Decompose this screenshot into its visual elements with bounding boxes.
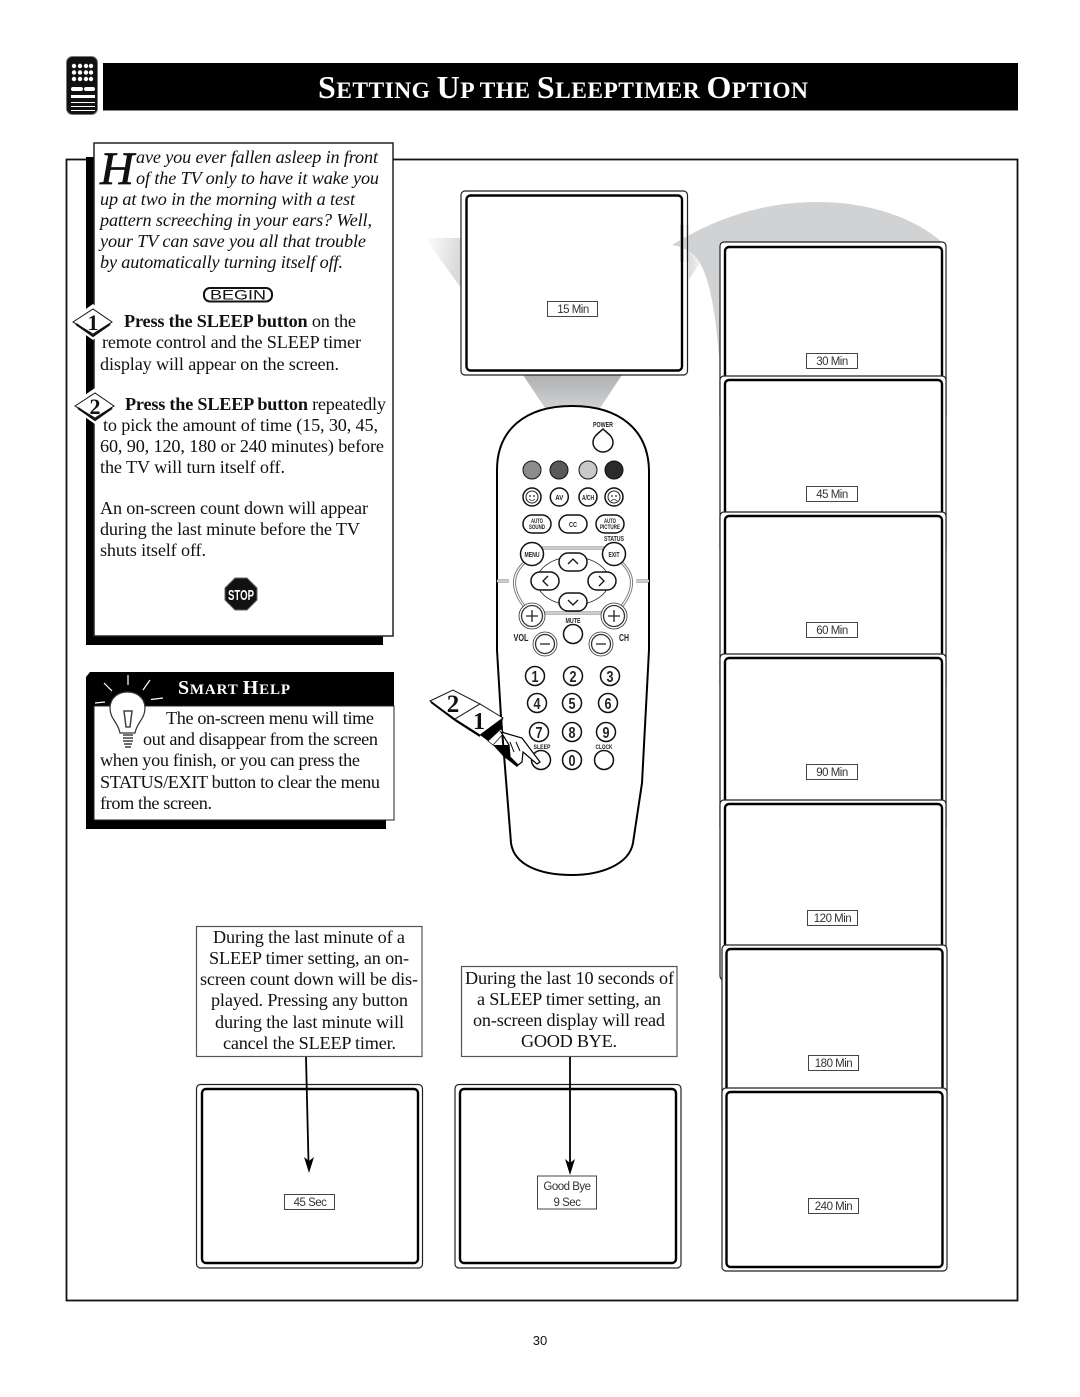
smart help text: when you finish, or you can press the	[100, 750, 360, 770]
smart help text: from the screen.	[100, 793, 212, 813]
countdown note: An on-screen count down will appear	[100, 498, 368, 518]
number buttons: CLOCK	[596, 744, 613, 751]
arrow: last minute to screen	[304, 1057, 314, 1173]
marker 1: 1	[473, 709, 485, 735]
callout: last ten seconds: GOOD BYE.	[521, 1031, 617, 1051]
beam: sweep to TV stack	[672, 202, 943, 375]
smart help text: The on-screen menu will time	[166, 708, 374, 728]
number buttons: SLEEP	[534, 744, 551, 751]
intro text: by automatically turning itself off.	[100, 252, 343, 272]
panel: stack of timer screens	[720, 242, 947, 1271]
step 2: the TV will turn itself off.	[100, 457, 285, 477]
callout: last ten seconds: a SLEEP timer setting, an	[477, 989, 661, 1009]
panel: smart help	[86, 672, 394, 829]
intro text: of the TV only to have it wake you	[136, 168, 379, 188]
function buttons: STATUS	[604, 536, 624, 543]
menu and exit buttons: MENU	[524, 552, 540, 559]
number buttons: 2	[570, 669, 577, 686]
countdown note: shuts itself off.	[100, 540, 206, 560]
step 2: Press the SLEEP button repeatedly	[125, 394, 387, 414]
callout: last minute: cancel the SLEEP timer.	[223, 1033, 396, 1053]
screen: 240 min	[722, 1088, 947, 1271]
step 1: 1	[88, 310, 98, 335]
smart help heading: SMART HELP	[178, 677, 290, 699]
function buttons: AUTO	[604, 519, 616, 525]
screen: good bye: 9 Sec	[554, 1197, 581, 1209]
volume, channel and mute buttons: CH	[619, 633, 629, 644]
power button	[593, 422, 613, 452]
marker 2: 2	[447, 691, 459, 718]
intro text	[98, 143, 379, 272]
arrow: last ten seconds to screen	[565, 1057, 575, 1175]
function buttons: AV	[555, 495, 564, 502]
screen: 45 min	[720, 376, 946, 554]
screen: 120 min: 120 Min	[814, 913, 851, 925]
label	[548, 302, 598, 316]
intro text: H	[99, 143, 137, 195]
screen: good bye	[455, 1084, 681, 1268]
smart help text: out and disappear from the screen	[143, 729, 378, 749]
main frame	[66, 160, 1018, 1300]
page number: 30	[533, 1333, 547, 1348]
beam: remote to TV	[523, 375, 622, 408]
step 2: to pick the amount of time (15, 30, 45,	[103, 415, 378, 436]
screen: 15 min	[461, 191, 688, 375]
screen: 30 min: 30 Min	[816, 356, 848, 368]
beam: pale left fan	[425, 238, 461, 288]
callout: last minute	[196, 926, 422, 1056]
callout: last minute: played. Pressing any button	[211, 990, 408, 1010]
title bar: SETTING UP THE SLEEPTIMER OPTION	[318, 69, 808, 105]
screen: 30 min	[720, 242, 946, 420]
number buttons: 8	[568, 725, 576, 742]
screen: 120 min	[720, 800, 946, 980]
intro text: pattern screeching in your ears? Well,	[98, 210, 372, 230]
number buttons: 9	[602, 725, 610, 742]
number buttons: 4	[534, 696, 541, 713]
number buttons: 0	[568, 753, 576, 770]
callout: last ten seconds: on-screen display will read	[473, 1010, 665, 1030]
callout: last minute: during the last minute will	[215, 1012, 404, 1032]
icon: remote control	[66, 56, 98, 114]
number buttons: 7	[536, 725, 543, 742]
number buttons: 6	[604, 696, 612, 713]
number buttons	[526, 666, 620, 770]
callout: last minute: During the last minute of a	[213, 927, 405, 947]
intro text: ave you ever fallen asleep in front	[136, 147, 379, 167]
step 2	[69, 388, 387, 477]
menu and exit buttons	[520, 542, 626, 566]
begin label	[204, 286, 272, 302]
screen: 90 min	[720, 654, 946, 832]
panel: introduction and steps	[67, 143, 393, 645]
function buttons: A/CH	[582, 495, 594, 502]
icon: pointing hand	[480, 718, 540, 767]
remote control	[497, 406, 649, 875]
function buttons	[523, 488, 624, 543]
begin label: BEGIN	[210, 286, 266, 302]
function buttons: CC	[569, 522, 577, 529]
intro text: your TV can save you all that trouble	[98, 231, 366, 251]
smart help text: STATUS/EXIT button to clear the menu	[100, 772, 380, 792]
step 1: display will appear on the screen.	[100, 354, 339, 374]
colour buttons	[523, 461, 623, 479]
navigation ring	[497, 548, 649, 613]
screen: 180 min	[722, 945, 947, 1125]
icon: light bulb	[95, 675, 163, 747]
label: 15 Min	[557, 304, 589, 316]
step 2: 60, 90, 120, 180 or 240 minutes) before	[100, 436, 384, 457]
screen: 60 min	[720, 512, 946, 690]
smart help text	[100, 708, 380, 813]
volume, channel and mute buttons: VOL	[514, 633, 528, 644]
intro text: up at two in the morning with a test	[100, 189, 356, 209]
number buttons: 3	[606, 669, 614, 686]
direction buttons	[531, 553, 616, 611]
step markers with pointing hand	[430, 690, 540, 767]
title bar	[103, 63, 1018, 110]
function buttons: PICTURE	[600, 525, 620, 531]
step 1: remote control and the SLEEP timer	[102, 332, 361, 352]
screen: 180 min: 180 Min	[815, 1058, 852, 1070]
countdown note	[100, 498, 368, 560]
function buttons: AUTO	[531, 519, 543, 525]
screen: 45 sec	[196, 1084, 422, 1268]
callout: last minute: screen count down will be dis-	[200, 969, 418, 989]
countdown note: during the last minute before the TV	[100, 519, 360, 539]
menu and exit buttons: EXIT	[608, 552, 620, 559]
number buttons: 5	[568, 696, 576, 713]
volume, channel and mute buttons	[514, 603, 629, 656]
number buttons: 1	[532, 669, 539, 686]
screen: 45 min: 45 Min	[816, 489, 848, 501]
volume, channel and mute buttons: MUTE	[566, 618, 581, 625]
screen: 90 min: 90 Min	[816, 767, 848, 779]
callout: last ten seconds	[462, 966, 677, 1056]
screen: good bye: Good Bye	[543, 1181, 591, 1193]
callout: last minute: SLEEP timer setting, an on-	[209, 948, 409, 968]
step 1	[67, 304, 361, 374]
callout: last ten seconds: During the last 10 seconds of	[465, 968, 675, 988]
step 1: Press the SLEEP button on the	[124, 311, 356, 331]
function buttons: SOUND	[529, 525, 545, 531]
icon: stop sign: STOP	[228, 587, 254, 604]
screen: 240 min: 240 Min	[815, 1201, 852, 1213]
icon: stop sign	[225, 578, 257, 610]
power button: POWER	[593, 422, 613, 429]
step 2: 2	[90, 394, 100, 419]
screen: 60 min: 60 Min	[816, 625, 848, 637]
screen: 45 sec: 45 Sec	[294, 1197, 327, 1209]
